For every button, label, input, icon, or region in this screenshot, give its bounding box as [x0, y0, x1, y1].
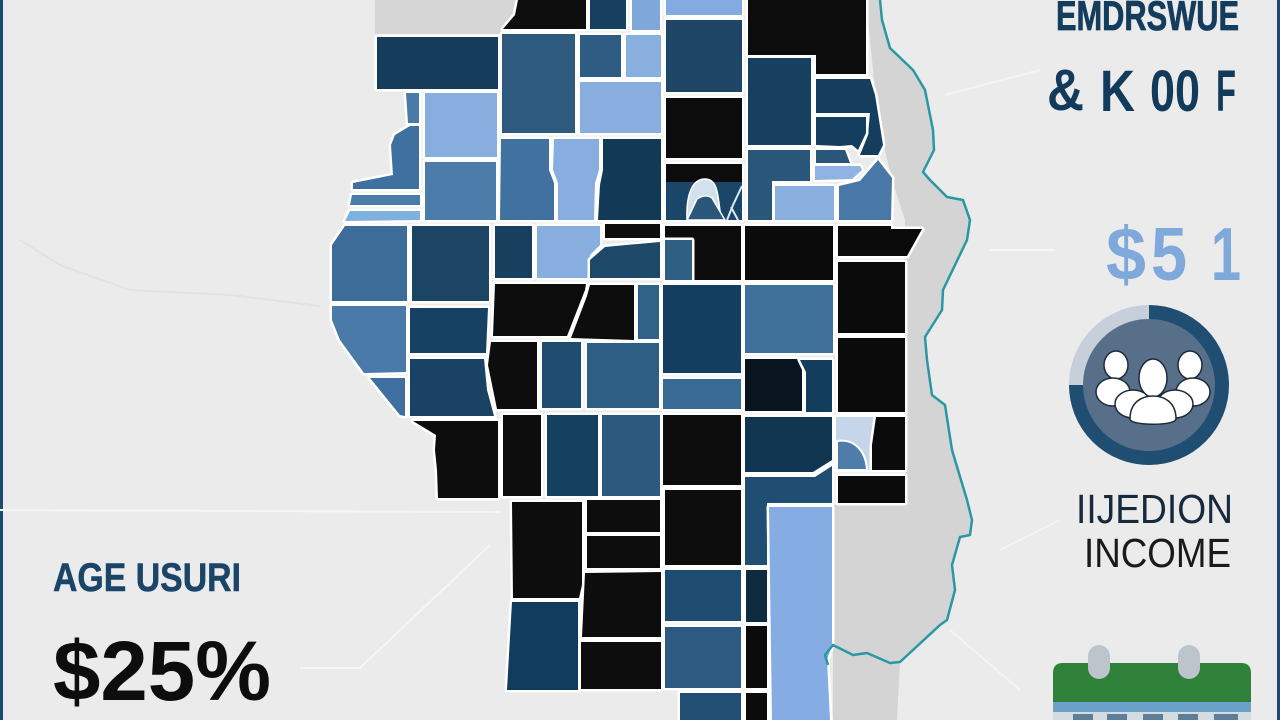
label: age group: AGE USURI	[53, 556, 241, 600]
faint connector lines	[0, 70, 1060, 690]
stat: garbled top right figures: &	[1047, 58, 1084, 123]
counties: top rows	[377, 0, 866, 158]
stat: dollar figure	[1106, 212, 1241, 296]
label: income: INCOME	[1084, 530, 1231, 576]
stat: percentage: $25%	[53, 624, 271, 718]
stat: garbled top right figures: 00	[1150, 59, 1200, 124]
stat: garbled top right figures	[1047, 58, 1236, 124]
choropleth county map	[332, 0, 922, 720]
stat: garbled top right figures: F	[1216, 59, 1236, 124]
gray land top-left	[375, 0, 519, 34]
river line	[825, 0, 972, 665]
stat: garbled top right figures: K	[1100, 59, 1135, 124]
counties: east block	[663, 226, 922, 720]
counties: north-east lakeshore	[666, 79, 892, 220]
counties: north-west fringe	[345, 93, 661, 221]
county detail: pale lake shape	[687, 179, 742, 220]
stat: dollar figure: 5	[1151, 212, 1187, 296]
label: median: IIJEDION	[1076, 486, 1233, 532]
icon: calendar	[1053, 645, 1251, 720]
stat: dollar figure: $	[1106, 212, 1146, 296]
stat: dollar figure: 1	[1211, 212, 1241, 296]
gray land along river	[833, 0, 972, 720]
counties: central band	[332, 224, 741, 498]
icon: people donut	[1076, 312, 1222, 458]
counties: south block	[507, 500, 767, 720]
